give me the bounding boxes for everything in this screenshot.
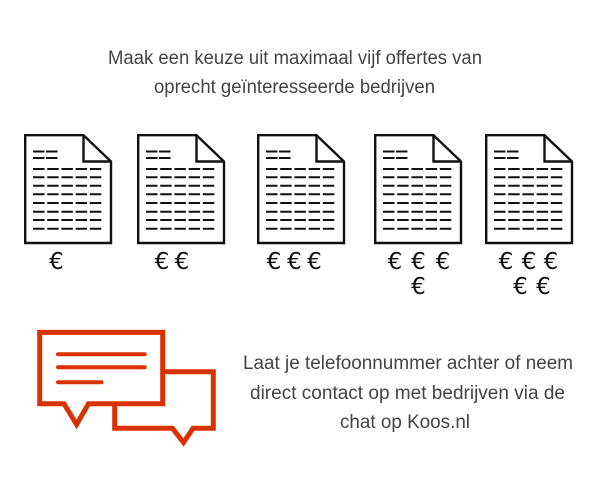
contact text: Laat je telefoonnummer achter of neem [243,353,573,374]
price: one euro: € [49,249,64,275]
heading: Maak een keuze uit maximaal vijf offertes van [108,48,482,69]
contact text: direct contact op met bedrijven via de [250,383,565,404]
price: four euros: € [388,249,402,275]
document 2 [138,135,224,243]
price: four euros: € [436,249,450,275]
document 5 [486,135,572,243]
price: five euros: € [513,274,528,300]
price: five euros [499,249,558,300]
price: four euros: € [411,249,426,275]
document 3 [258,135,344,243]
price: three euros: € [267,249,281,275]
price: five euros: € [544,249,558,275]
heading [108,48,482,98]
document 1 [25,135,111,243]
price: five euros: € [499,249,513,275]
document 4 [375,135,461,243]
price: two euros [155,249,189,275]
price: five euros: € [536,274,551,300]
price: two euros: € [175,249,189,275]
price: three euros [267,249,322,275]
price: three euros: € [307,249,322,275]
price: four euros [388,249,450,300]
price: three euros: € [287,249,302,275]
price: five euros: € [522,249,536,275]
price: four euros: € [411,274,426,300]
heading: oprecht geïnteresseerde bedrijven [154,77,435,98]
contact text [243,353,573,433]
price: two euros: € [155,249,169,275]
icon: chat bubbles [40,332,213,442]
contact text: chat op Koos.nl [340,412,470,433]
